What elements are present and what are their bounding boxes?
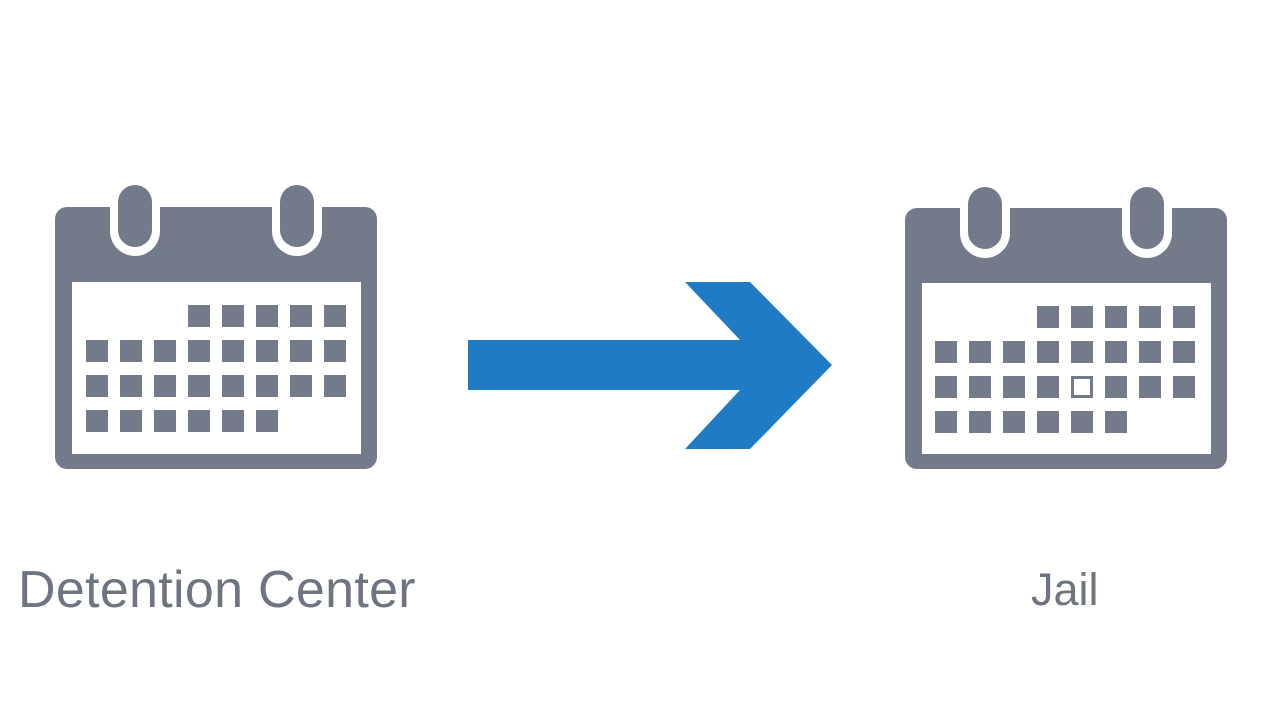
label: Jail: Jail	[1031, 564, 1099, 615]
icon: right calendar	[905, 182, 1227, 469]
icon: left calendar	[55, 180, 377, 469]
label: Detention Center: Detention Center	[18, 561, 416, 619]
arrow	[468, 282, 832, 449]
